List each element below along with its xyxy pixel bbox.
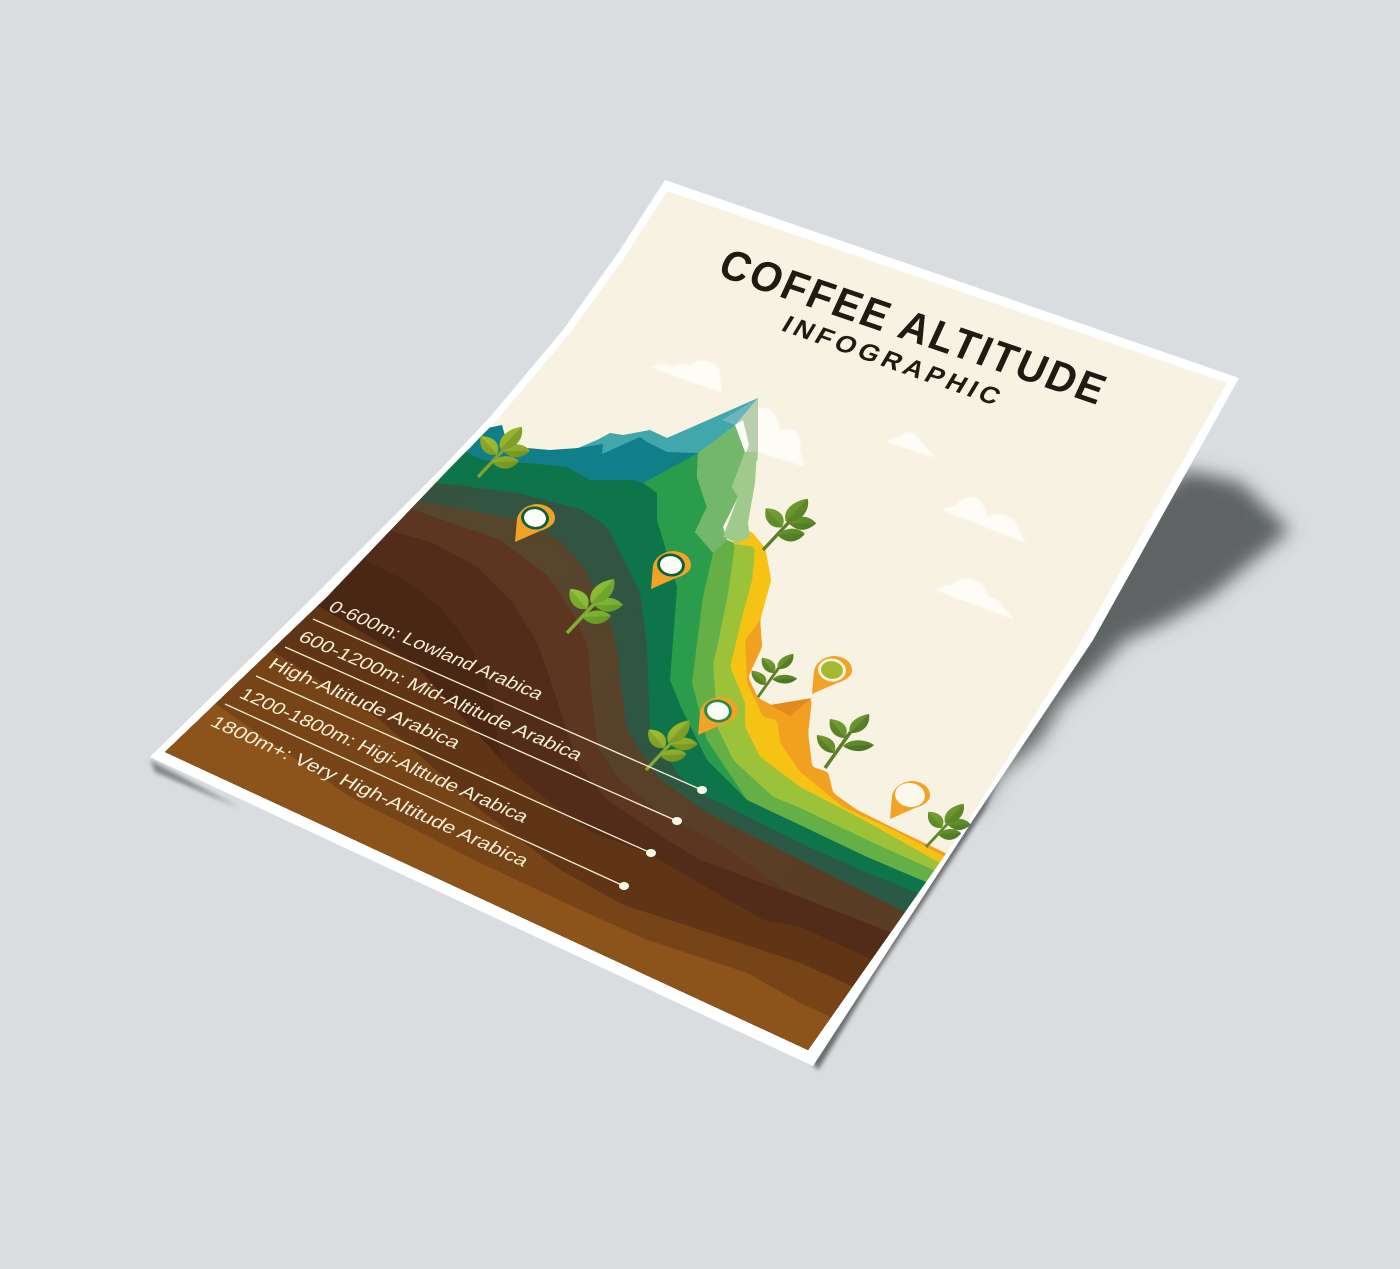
mountain and altitude layers (165, 398, 970, 1050)
label: high altitude: High-Altitude Arabica (264, 655, 465, 753)
label: 1800m+: 1800m+: Very High-Altitude Arabica (206, 713, 533, 871)
dark green band (165, 452, 926, 1050)
clouds (650, 361, 1026, 620)
bright green band (262, 453, 926, 1048)
map pin D (812, 656, 852, 694)
mountain peak: pale rock (735, 398, 758, 462)
label: 1200-1800m: 1200-1800m: Higi-Alttude Arabica (235, 685, 533, 827)
orange shadow facet (770, 698, 812, 716)
map pin E (890, 781, 930, 819)
grey-green band (166, 482, 918, 1048)
dark brown band (165, 530, 890, 1050)
brown layer 3 (165, 704, 831, 1050)
lime band (713, 544, 940, 930)
altitude labels (206, 598, 587, 871)
mountain: teal slope (440, 425, 698, 483)
map pin A (515, 504, 555, 542)
plant 5 (817, 714, 874, 768)
plant 3 (763, 499, 816, 550)
brown band (165, 508, 884, 1050)
plant 2 (567, 579, 623, 633)
orange band (745, 551, 946, 1038)
map pin C (698, 697, 738, 735)
label: mid altitude: 600-1200m: Mid-Altitude Arabica (294, 628, 587, 765)
mountain: light teal ridge (570, 398, 758, 460)
plant 1 (478, 427, 530, 477)
leader lines with end dots (225, 619, 707, 890)
olive-brown band (166, 501, 905, 1050)
poster paper (150, 180, 1239, 1066)
cliff: pale green facet (723, 452, 757, 543)
plant 4 (752, 654, 797, 697)
brown layer 2 (165, 650, 852, 1018)
mountain peak: snow (735, 420, 749, 455)
yellow band (730, 532, 944, 1038)
plant 7 (646, 720, 698, 770)
plant 6 (926, 804, 971, 847)
title: COFFEE ALTITUDE (712, 239, 1113, 413)
mountain: sky-blue peak facet (722, 398, 758, 425)
brown layer 1 (165, 606, 872, 1050)
paper shadow (150, 470, 1290, 1070)
cliff: light green facet (695, 425, 745, 553)
subtitle: INFOGRAPHIC (777, 312, 1005, 410)
darkest dome (249, 559, 500, 757)
green band (692, 533, 934, 932)
label: lowland: 0-600m: Lowland Arabica (324, 598, 548, 704)
map pin B (651, 551, 691, 589)
